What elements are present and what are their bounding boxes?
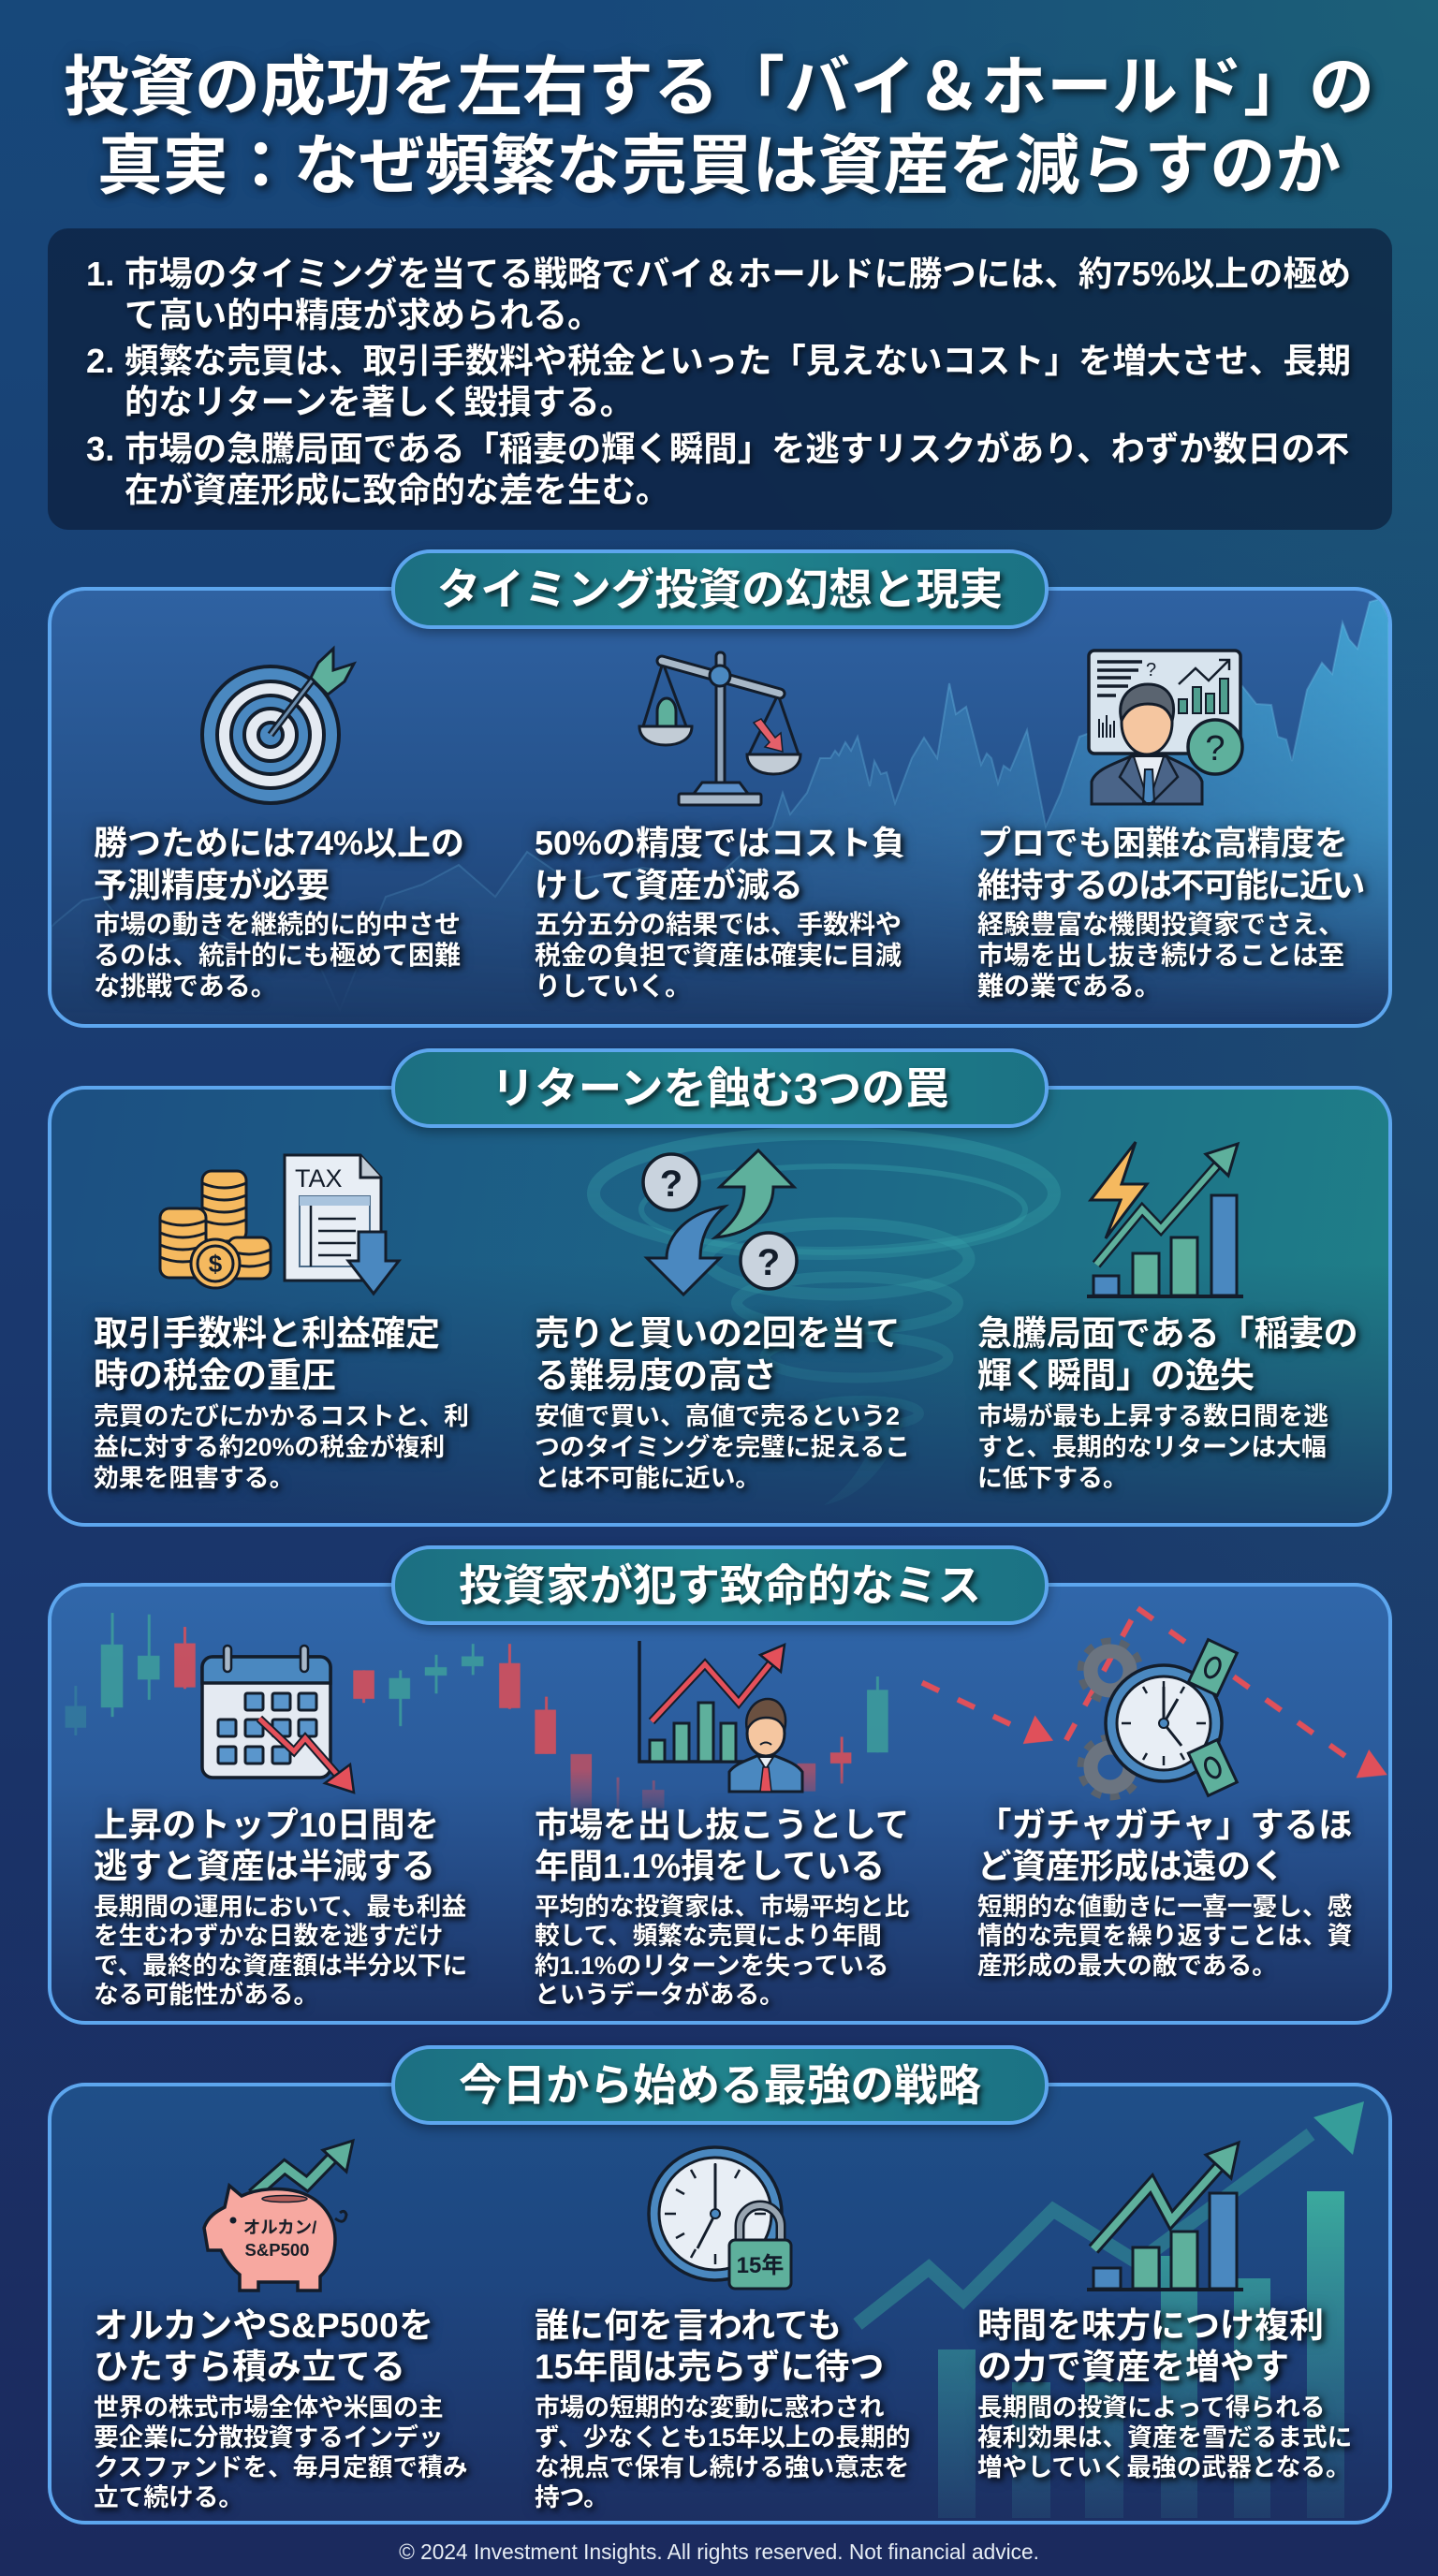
icon: analyst with board: ? [1146, 660, 1156, 681]
column: top 10 days [94, 1640, 506, 2000]
heading: 「ガチャガチャ」するほ [977, 1806, 1353, 1844]
section background: candlesticks and dashed arrows [48, 1583, 1392, 2025]
body text: 産形成の最大の敵である。 [977, 1952, 1277, 1980]
body text: に低下する。 [977, 1464, 1128, 1492]
heading [530, 820, 909, 908]
body text [94, 1893, 467, 2010]
section heading [391, 1545, 1049, 1625]
panel: summary points: 3. [86, 430, 114, 468]
panel: summary points: 1. [86, 255, 114, 293]
panel: three traps section [48, 1047, 1392, 1527]
column: professionals [972, 649, 1371, 1005]
body text: 要企業に分散投資するインデッ [94, 2423, 444, 2452]
heading: ど資産形成は遠のく [977, 1847, 1284, 1885]
title: 投資の成功を左右する「バイ＆ホールド」の [64, 51, 1374, 124]
heading [535, 2305, 884, 2388]
body text: すと、長期的なリターンは大幅 [977, 1433, 1327, 1461]
body text: 市場が最も上昇する数日間を逃 [977, 1402, 1328, 1430]
body text: 約1.1%のリターンを失っている [535, 1952, 888, 1980]
body text: 益に対する約20%の税金が複利 [94, 1433, 445, 1461]
body text: 五分五分の結果では、手数料や [535, 910, 902, 939]
summary point 1 [86, 255, 1353, 335]
icon: clock with padlock [646, 2145, 796, 2291]
heading: 逃すと資産は半減する [94, 1847, 435, 1885]
summary point 2 [86, 342, 1354, 422]
icon: up and down arrows with question marks: ? [757, 1242, 780, 1283]
body text: な視点で保有し続ける強い意志を [535, 2453, 909, 2481]
body text: クスファンドを、毎月定額で積み [94, 2453, 468, 2481]
body text: 較して、頻繁な売買により年間 [535, 1922, 882, 1950]
footer: © 2024 Investment Insights. All rights reserved. Not financial advice. [399, 2539, 1039, 2564]
body text [92, 906, 466, 1004]
column: gacha trading [977, 1640, 1389, 2000]
column: 50% accuracy [530, 651, 909, 1003]
summary point 2: 頻繁な売買は、取引手数料や税金といった「見えないコスト」を増大させ、長期 [125, 342, 1351, 380]
body text: つのタイミングを完璧に捉えるこ [535, 1433, 910, 1461]
body text: を生むわずかな日数を逃すだけ [94, 1922, 444, 1950]
body text: 市場を出し抜き続けることは至 [977, 941, 1344, 970]
icon: piggy bank [200, 2139, 360, 2293]
body text: で、最終的な資産額は半分以下に [94, 1952, 467, 1980]
column: beating the market [535, 1640, 946, 2000]
section heading: 今日から始める最強の戦略 [459, 2061, 981, 2110]
section heading [391, 549, 1049, 629]
body text [535, 1893, 909, 2010]
body text [977, 1401, 1328, 1494]
heading [94, 1312, 440, 1397]
summary point 3: 市場の急騰局面である「稲妻の輝く瞬間」を逃すリスクがあり、わずか数日の不 [125, 430, 1349, 468]
heading: 取引手数料と利益確定 [94, 1314, 440, 1353]
heading: の力で資産を増やす [977, 2348, 1289, 2386]
heading [89, 820, 470, 908]
body text: りしていく。 [535, 972, 691, 1001]
heading: 売りと買いの2回を当て [535, 1314, 901, 1353]
icon: worried investor with chart [638, 1640, 808, 1797]
summary point 3 [86, 430, 1352, 510]
icon: calendar with falling arrow [198, 1642, 358, 1796]
section background: tornado [48, 1086, 1392, 1527]
title: 真実：なぜ頻繁な売買は資産を減らすのか [97, 129, 1341, 202]
body text [977, 1893, 1352, 1981]
body text: 立て続ける。 [94, 2483, 243, 2511]
heading: 市場を出し抜こうとして [535, 1806, 909, 1844]
body text [535, 2393, 910, 2512]
icon: target with arrow [200, 646, 357, 805]
section background: growth bars and arrow [48, 2083, 1392, 2525]
body text: 難の業である。 [977, 972, 1161, 1001]
heading: 年間1.1%損をしている [535, 1847, 885, 1885]
body text: というデータがある。 [535, 1981, 785, 2009]
body text [94, 2393, 468, 2512]
column: double timing [535, 1144, 946, 1504]
heading [977, 1805, 1353, 1887]
icon: up and down arrows with question marks [642, 1147, 801, 1296]
heading: 急騰局面である「稲妻の [977, 1314, 1358, 1353]
section heading: タイミング投資の幻想と現実 [437, 565, 1003, 614]
icon: piggy bank: S&P500 [245, 2240, 309, 2260]
body text: 税金の負担で資産は確実に目減 [535, 941, 902, 970]
body text: ず、少なくとも15年以上の長期的 [535, 2423, 910, 2452]
summary point 3: 在が資産形成に致命的な差を生む。 [125, 471, 669, 509]
section heading: 投資家が犯す致命的なミス [459, 1561, 981, 1610]
icon: rising bars and arrow [1084, 2139, 1245, 2293]
section heading [391, 1048, 1049, 1128]
summary point 1: て高い的中精度が求められる。 [125, 296, 601, 334]
heading [94, 2305, 434, 2388]
panel: fatal mistakes section [48, 1544, 1392, 2025]
section heading [391, 2045, 1049, 2125]
icon: coins and tax form: $ [209, 1250, 223, 1278]
column: hold 15 years [535, 2139, 946, 2509]
body text [535, 1401, 910, 1494]
heading: プロでも困難な高精度を [977, 824, 1348, 862]
heading: 輝く瞬間」の逸失 [977, 1356, 1255, 1395]
icon: analyst with board [1087, 649, 1244, 806]
heading: 予測精度が必要 [94, 866, 330, 904]
icon: coins and tax form [157, 1151, 403, 1296]
icon: piggy bank: オルカン/ [243, 2217, 316, 2237]
heading [535, 1312, 901, 1397]
body text: な挑戦である。 [94, 972, 277, 1001]
section heading: リターンを蝕む3つの罠 [492, 1064, 948, 1113]
summary point 2: 的なリターンを著しく毀損する。 [125, 383, 634, 421]
icon: up and down arrows with question marks: ? [660, 1164, 682, 1205]
body text: とは不可能に近い。 [535, 1464, 760, 1492]
heading: 15年間は売らずに待つ [535, 2348, 884, 2386]
icon: coins and tax form: TAX [295, 1164, 343, 1193]
section background: market line chart [48, 587, 1392, 1028]
body text: 情的な売買を繰り返すことは、資 [977, 1922, 1352, 1950]
body text: 複利効果は、資産を雪だるま式に [977, 2423, 1352, 2452]
body text: 短期的な値動きに一喜一憂し、感 [977, 1893, 1352, 1921]
column: 74% accuracy [89, 646, 470, 1004]
body text: るのは、統計的にも極めて困難 [94, 941, 461, 970]
body text: 安値で買い、高値で売るという2 [535, 1402, 900, 1430]
summary point 1: 市場のタイミングを当てる戦略でバイ＆ホールドに勝つには、約75%以上の極め [125, 255, 1351, 293]
heading: 誰に何を言われても [535, 2306, 842, 2345]
icon: analyst with board: ? [1205, 729, 1225, 768]
column: index funds [94, 2139, 506, 2509]
icon: clock with gears and money [1078, 1641, 1245, 1797]
body text: 長期間の運用において、最も利益 [94, 1893, 466, 1921]
panel: timing investing section [48, 549, 1392, 1028]
body text: 経験豊富な機関投資家でさえ、 [977, 910, 1344, 939]
icon: clock with padlock: 15年 [737, 2253, 784, 2278]
body text [530, 905, 908, 1003]
heading: る難易度の高さ [535, 1356, 777, 1395]
heading: 時間を味方につけ複利 [977, 2306, 1324, 2345]
body text: 世界の株式市場全体や米国の主 [94, 2393, 444, 2422]
heading: オルカンやS&P500を [94, 2306, 434, 2345]
panel: summary points: 2. [86, 342, 114, 380]
body text: なる可能性がある。 [94, 1981, 318, 2009]
panel: summary points [48, 228, 1392, 530]
heading: けして資産が減る [535, 866, 803, 904]
column: lightning moment [977, 1144, 1389, 1504]
body text [94, 1401, 469, 1494]
body text: 増やしていく最強の武器となる。 [977, 2453, 1351, 2481]
icon: balance scale [638, 651, 801, 807]
heading: 50%の精度ではコスト負 [535, 824, 905, 862]
body text: 売買のたびにかかるコストと、利 [94, 1402, 469, 1430]
heading [977, 822, 1364, 906]
column: fees and taxes [94, 1144, 506, 1504]
body text: 持つ。 [535, 2483, 609, 2511]
heading: 上昇のトップ10日間を [94, 1806, 439, 1844]
icon: lightning and rising bars [1084, 1140, 1245, 1299]
body text [977, 2393, 1352, 2482]
body text: 長期間の投資によって得られる [977, 2393, 1326, 2422]
column: compounding [977, 2139, 1389, 2509]
heading [977, 2305, 1324, 2388]
heading: 時の税金の重圧 [94, 1356, 336, 1395]
body text: 平均的な投資家は、市場平均と比 [535, 1893, 909, 1921]
body text: 市場の動きを継続的に的中させ [94, 910, 461, 939]
heading: ひたすら積み立てる [94, 2348, 405, 2386]
panel: best strategy section [48, 2045, 1392, 2525]
heading: 勝つためには74%以上の [94, 824, 464, 862]
heading [977, 1312, 1358, 1397]
body text: 効果を阻害する。 [94, 1464, 294, 1492]
heading [535, 1805, 909, 1887]
title [63, 49, 1378, 202]
heading [94, 1805, 439, 1887]
body text [977, 909, 1344, 1002]
heading: 維持するのは不可能に近い [977, 866, 1364, 904]
body text: 市場の短期的な変動に惑わされ [535, 2393, 885, 2422]
